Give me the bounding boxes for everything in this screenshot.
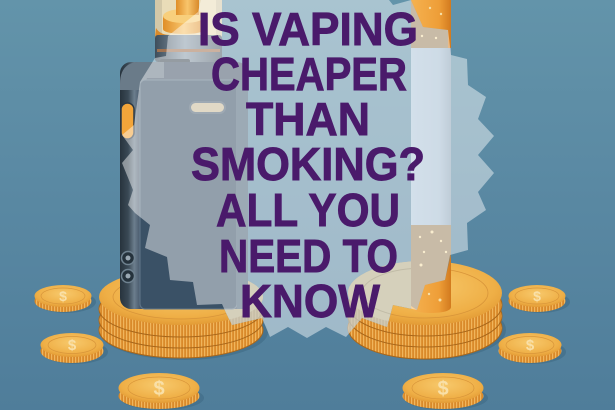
vape round buttons [122,252,134,282]
title: CHEAPER [211,48,407,100]
coin stack under vape [99,269,268,360]
title: KNOW [240,275,381,327]
coins: left loose coins: $ [59,288,67,304]
coins: left loose coins: $ [68,337,77,354]
coin stack under cigarette [348,261,506,360]
coins: left loose coins [34,285,204,410]
vape top cap [120,62,164,90]
title: THAN [246,93,370,145]
coins: left loose coins: $ [153,378,165,400]
coins: right loose coins: $ [526,337,535,354]
title [191,3,425,327]
title: IS VAPING [198,3,418,55]
title: NEED TO [219,230,398,282]
vape orange button [121,103,134,139]
vape right side [237,80,248,309]
muted filter areas under starburst [411,0,448,48]
muted coin areas under starburst [224,262,412,334]
vape body [120,62,248,309]
coins: right loose coins [402,285,570,410]
vape device [120,0,248,309]
cigarette [411,0,451,313]
vape display slot [190,102,225,113]
coins: right loose coins: $ [533,288,541,304]
vape tank [155,0,222,80]
title: SMOKING? [191,138,425,190]
cigarette paper [411,48,451,225]
title: ALL YOU [216,184,400,236]
starburst overlay [122,0,494,338]
coins: right loose coins: $ [437,378,449,400]
vape front panel [140,80,237,309]
cigarette top filter [411,0,451,48]
filter speckles [419,7,447,302]
cigarette lower filter [411,225,451,313]
